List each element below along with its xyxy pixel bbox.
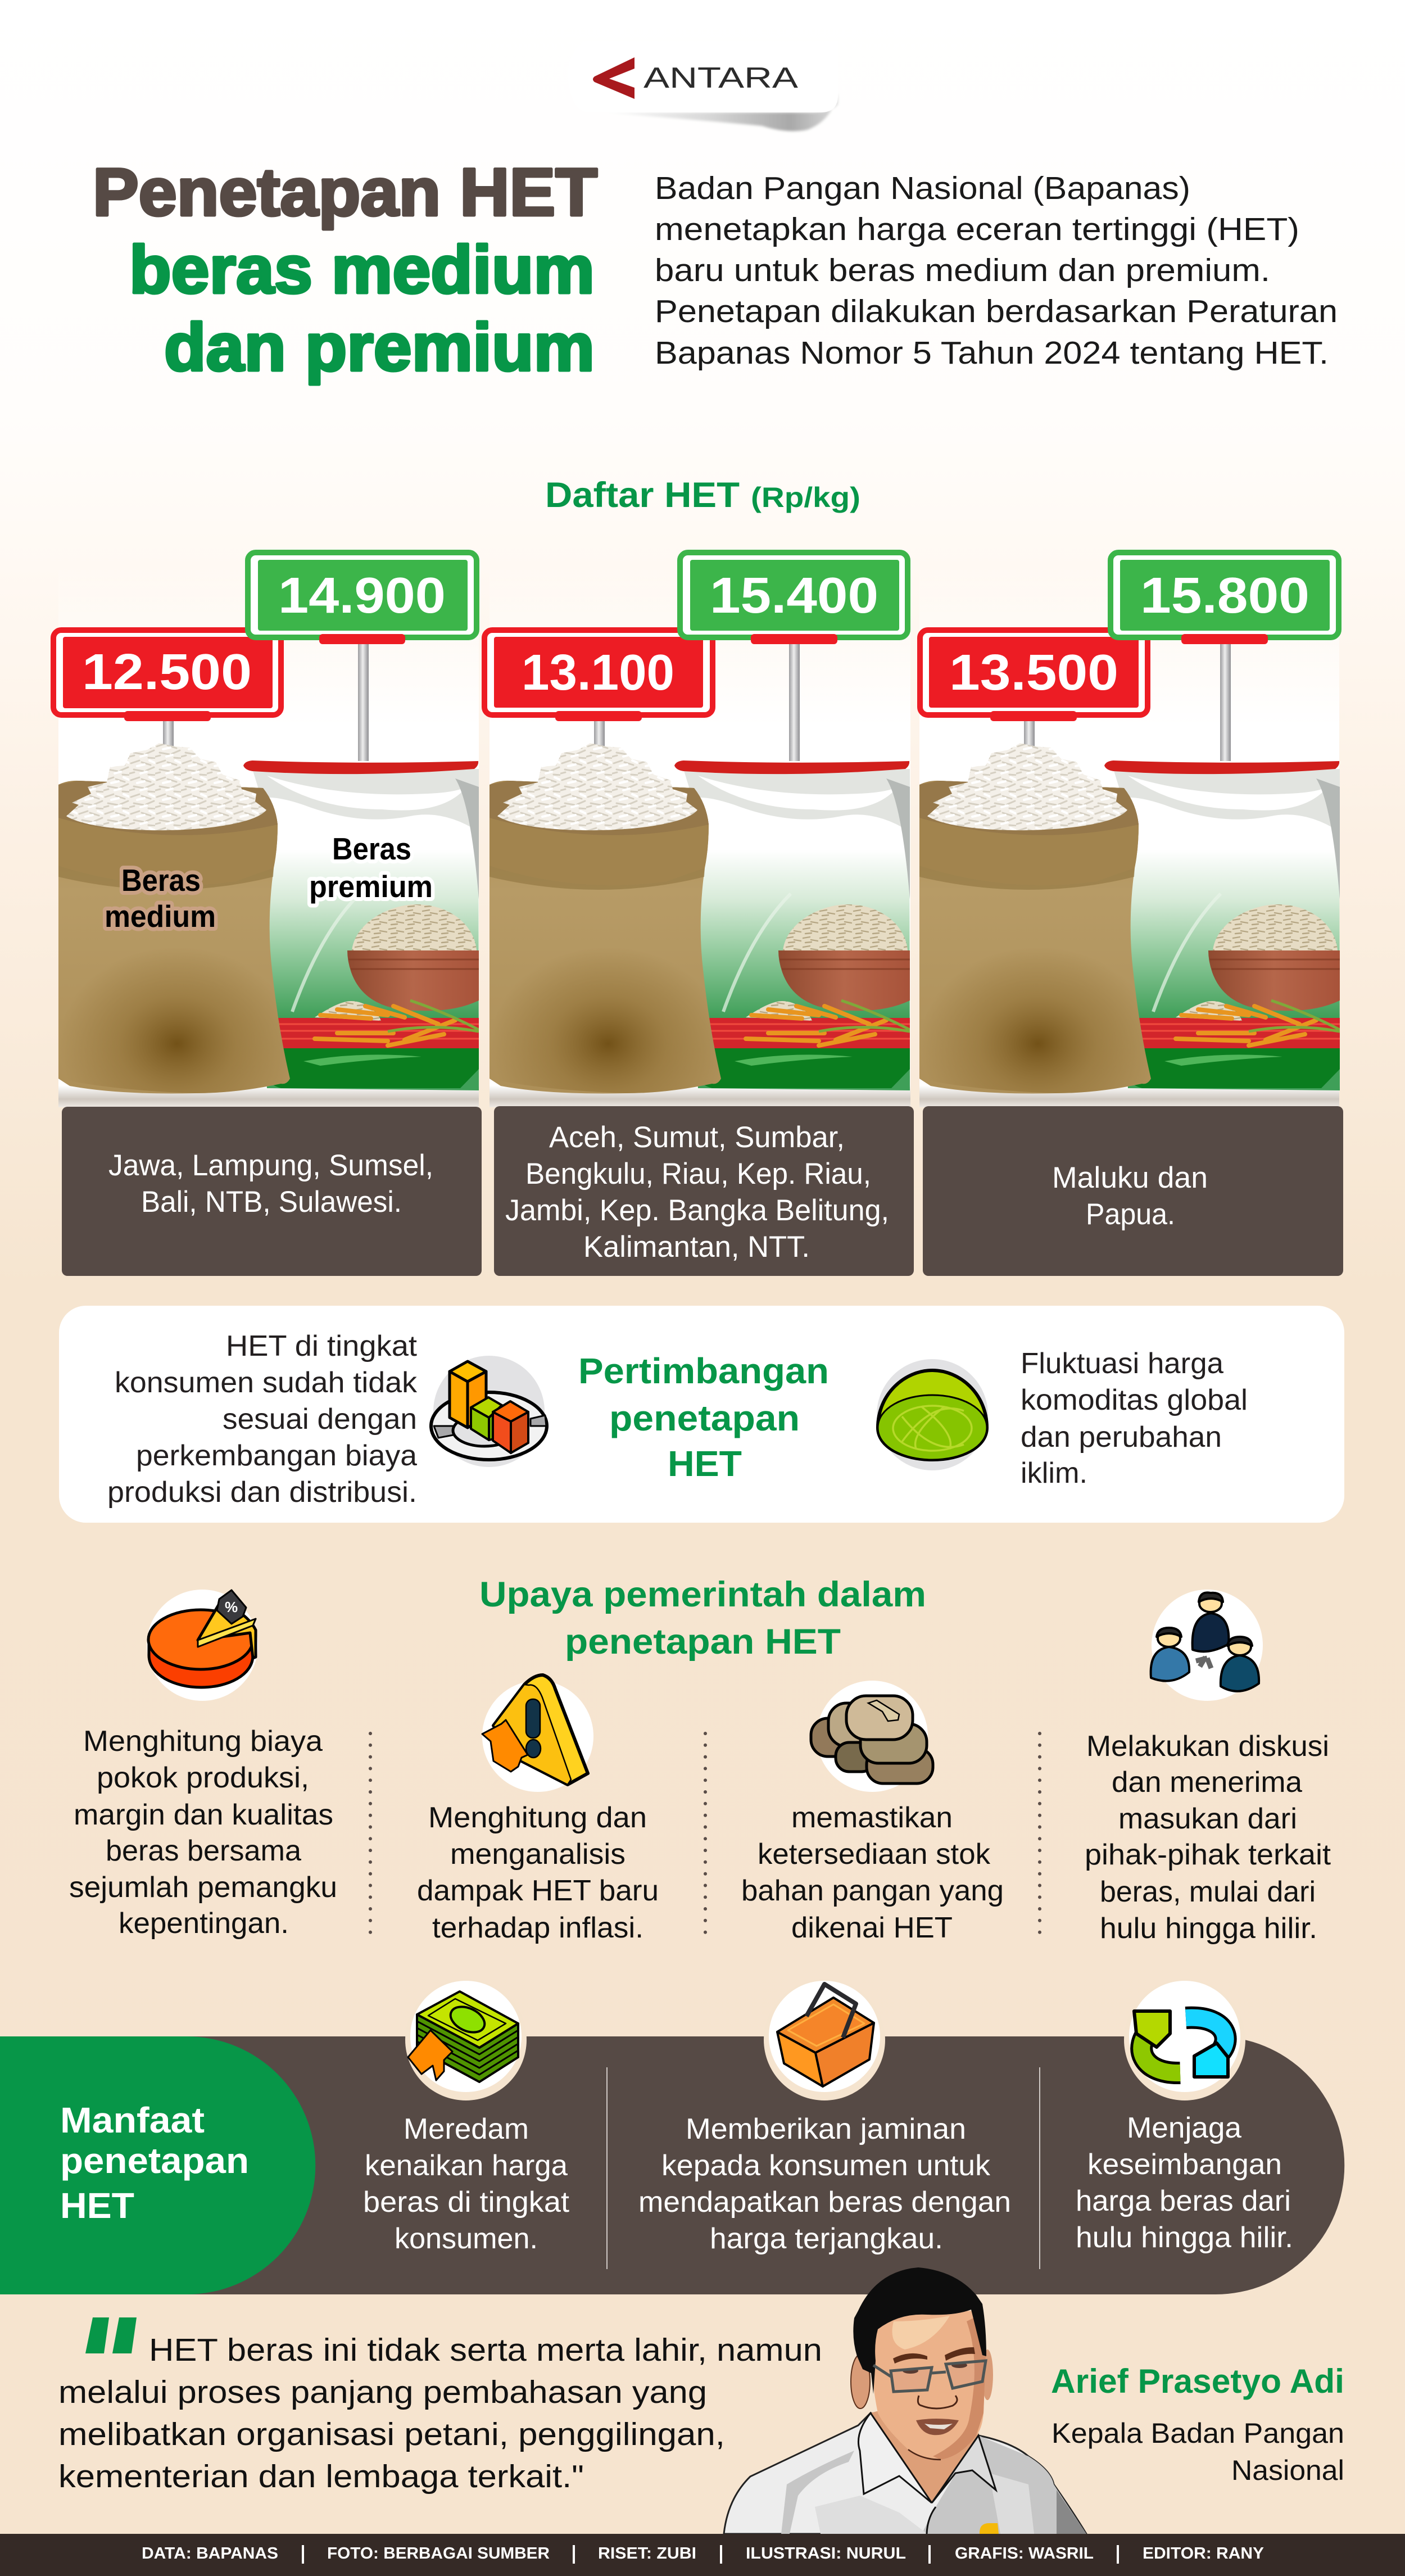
text: upaya 4: hulu hingga hilir. <box>1100 1912 1317 1945</box>
footer credits: ILUSTRASI: NURUL <box>746 2545 906 2563</box>
heading: manfaat: Manfaat <box>60 2100 205 2140</box>
panel: price column 3 <box>919 553 1343 1276</box>
label: beras premium: premium <box>309 869 433 904</box>
heading: Daftar HET: (Rp/kg) <box>751 482 860 513</box>
price tag: medium 12.500 <box>53 630 281 721</box>
heading: Daftar HET <box>545 476 860 515</box>
text: right consideration: iklim. <box>1021 1457 1087 1490</box>
intro text: Bapanas Nomor 5 Tahun 2024 tentang HET. <box>655 335 1329 371</box>
logo: ANTARA: ANTARA <box>643 62 798 94</box>
text: manfaat 3: Menjaga <box>1127 2112 1241 2144</box>
heading: pertimbangan: penetapan <box>609 1398 800 1438</box>
text: manfaat 3: harga beras dari <box>1076 2185 1291 2217</box>
quote: melibatkan organisasi petani, penggilingan, <box>58 2416 725 2452</box>
title: dan premium <box>164 310 595 385</box>
heading: pertimbangan: Pertimbangan <box>578 1351 829 1391</box>
footer credits: DATA: BAPANAS <box>142 2545 278 2563</box>
heading: Daftar HET: Daftar HET <box>545 476 740 515</box>
text: upaya 1 <box>69 1725 337 1940</box>
region box 2: Aceh, Sumut, Sumbar, <box>549 1121 845 1154</box>
text: upaya 3: memastikan <box>791 1801 953 1834</box>
quote <box>58 2317 822 2494</box>
title: Penetapan HET <box>93 155 597 230</box>
text: upaya 4: dan menerima <box>1112 1766 1302 1799</box>
text: upaya 3: bahan pangan yang <box>741 1875 1004 1907</box>
name: Arief Prasetyo Adi: Nasional <box>1231 2455 1344 2486</box>
label: beras medium: Beras <box>121 863 201 898</box>
name: Arief Prasetyo Adi <box>1051 2362 1344 2486</box>
text: upaya 1: margin dan kualitas <box>74 1799 333 1831</box>
price tag: premium 14.900 <box>248 553 477 644</box>
text: upaya 4: masukan dari <box>1118 1803 1297 1835</box>
text: upaya 2: terhadap inflasi. <box>432 1912 643 1944</box>
text: left consideration: HET di tingkat <box>226 1330 418 1362</box>
text: upaya 1: beras bersama <box>106 1835 301 1867</box>
footer credits: EDITOR: RANY <box>1143 2545 1264 2563</box>
text: manfaat 3: keseimbangan <box>1087 2148 1282 2181</box>
icon: rice sacks <box>811 1681 933 1792</box>
text: upaya 4 <box>1085 1730 1331 1945</box>
region box 3: Maluku dan <box>1052 1161 1208 1194</box>
region box 2 <box>494 1106 914 1276</box>
panel: pertimbangan penetapan HET <box>59 1306 1344 1523</box>
text: manfaat 2: Memberikan jaminan <box>686 2113 966 2145</box>
quote: kementerian dan lembaga terkait." <box>58 2459 584 2494</box>
title <box>93 155 597 385</box>
heading: pertimbangan <box>578 1351 829 1484</box>
icon: shopping basket <box>764 1979 885 2100</box>
heading: upaya pemerintah <box>479 1575 926 1662</box>
icon: warning with arrow <box>482 1675 593 1792</box>
text: left consideration: konsumen sudah tidak <box>115 1366 418 1399</box>
price tag: medium 13.100: 13.100 <box>522 645 674 701</box>
text: upaya 4: pihak-pihak terkait <box>1085 1839 1331 1871</box>
price tag: medium 13.500: 13.500 <box>949 645 1118 701</box>
intro text: Badan Pangan Nasional (Bapanas) <box>655 170 1190 206</box>
intro text: baru untuk beras medium dan premium. <box>655 252 1270 288</box>
text: manfaat 1: kenaikan harga <box>365 2149 568 2182</box>
icon: pie chart <box>147 1590 258 1701</box>
text: upaya 2: Menghitung dan <box>428 1801 647 1834</box>
price tag: premium 14.900: 14.900 <box>278 568 446 624</box>
text: upaya 2: dampak HET baru <box>417 1875 659 1907</box>
band: manfaat penetapan HET <box>0 1979 1344 2294</box>
region box 3: Papua. <box>1086 1198 1175 1231</box>
text: upaya 3 <box>741 1801 1004 1944</box>
price tag: premium 15.800: 15.800 <box>1140 568 1309 624</box>
region box 2: Jambi, Kep. Bangka Belitung, <box>505 1194 889 1227</box>
text: upaya 4: Melakukan diskusi <box>1086 1730 1329 1763</box>
intro text: menetapkan harga eceran tertinggi (HET) <box>655 211 1299 247</box>
text: upaya 1: pokok produksi, <box>97 1762 309 1794</box>
heading: manfaat: penetapan <box>60 2140 249 2181</box>
text: upaya 1: kepentingan. <box>119 1907 289 1940</box>
heading: upaya pemerintah: penetapan HET <box>565 1622 841 1662</box>
region box 2: Bengkulu, Riau, Kep. Riau, <box>525 1157 871 1190</box>
text: upaya 1: sejumlah pemangku <box>69 1871 337 1904</box>
icon: people discussion <box>1151 1590 1263 1701</box>
intro text <box>655 170 1338 371</box>
text: manfaat 1: konsumen. <box>395 2222 538 2255</box>
icon: green half globe <box>877 1359 988 1470</box>
heading: manfaat <box>60 2100 249 2226</box>
name: Arief Prasetyo Adi: Kepala Badan Pangan <box>1052 2417 1344 2449</box>
text: right consideration: dan perubahan <box>1021 1421 1222 1454</box>
region box 3 <box>923 1106 1343 1276</box>
price tag: premium 15.400 <box>680 553 908 644</box>
text: left consideration: sesuai dengan <box>223 1403 417 1436</box>
icon: money stack <box>405 1979 527 2100</box>
label: beras medium <box>105 863 216 934</box>
region box 1 <box>62 1107 482 1276</box>
text: upaya 2: menganalisis <box>450 1838 626 1871</box>
label: beras premium <box>309 831 433 904</box>
text: manfaat 2: mendapatkan beras dengan <box>638 2186 1011 2219</box>
price tag: medium 13.100 <box>484 630 713 721</box>
quote: HET beras ini tidak serta merta lahir, namun <box>149 2332 822 2368</box>
footer credits: GRAFIS: WASRIL <box>955 2545 1094 2563</box>
text: manfaat 2: kepada konsumen untuk <box>661 2149 991 2182</box>
icon: balance arrows <box>1124 1979 1245 2100</box>
icon: pie chart: % <box>225 1599 238 1615</box>
heading: upaya pemerintah: Upaya pemerintah dalam <box>479 1575 926 1614</box>
text: manfaat 1: beras di tingkat <box>363 2186 570 2219</box>
icon: bar chart <box>431 1356 547 1467</box>
footer credits <box>0 2534 1405 2576</box>
panel: price column 2 <box>484 553 914 1276</box>
text: right consideration: Fluktuasi harga <box>1021 1347 1223 1380</box>
text: left consideration <box>107 1330 418 1509</box>
heading: manfaat: HET <box>60 2185 134 2226</box>
quote: melalui proses panjang pembahasan yang <box>58 2374 707 2410</box>
text: right consideration: komoditas global <box>1021 1384 1248 1416</box>
text: right consideration <box>1021 1347 1248 1490</box>
price tag: premium 15.400: 15.400 <box>710 568 878 624</box>
label: beras medium: medium <box>105 899 216 934</box>
text: left consideration: perkembangan biaya <box>136 1439 417 1472</box>
region box 2: Kalimantan, NTT. <box>583 1230 810 1264</box>
icon: quotation mark <box>85 2317 137 2353</box>
price tag: medium 12.500: 12.500 <box>82 644 252 700</box>
text: upaya 3: ketersediaan stok <box>758 1838 991 1871</box>
intro text: Penetapan dilakukan berdasarkan Peraturan <box>655 293 1338 329</box>
footer credits: FOTO: BERBAGAI SUMBER <box>327 2545 550 2563</box>
text: manfaat 1: Meredam <box>404 2113 529 2145</box>
text: left consideration: produksi dan distribusi. <box>107 1476 417 1509</box>
text: manfaat 1 <box>363 2113 570 2255</box>
price tag: medium 13.500 <box>920 630 1148 721</box>
footer credits: RISET: ZUBI <box>598 2545 696 2563</box>
text: upaya 4: beras, mulai dari <box>1100 1876 1316 1908</box>
title: beras medium <box>129 232 595 307</box>
heading: pertimbangan: HET <box>668 1443 742 1484</box>
text: upaya 1: Menghitung biaya <box>83 1725 323 1758</box>
region box 1: Jawa, Lampung, Sumsel, <box>108 1149 433 1182</box>
text: manfaat 3 <box>1076 2112 1293 2254</box>
name: Arief Prasetyo Adi: Arief Prasetyo Adi <box>1051 2362 1344 2400</box>
logo: ANTARA <box>568 42 838 131</box>
text: upaya 3: dikenai HET <box>791 1912 953 1944</box>
text: manfaat 3: hulu hingga hilir. <box>1076 2221 1293 2254</box>
region box 1: Bali, NTB, Sulawesi. <box>141 1185 402 1219</box>
price tag: premium 15.800 <box>1111 553 1339 644</box>
text: manfaat 2: harga terjangkau. <box>710 2222 943 2255</box>
label: beras premium: Beras <box>332 831 411 866</box>
text: upaya 2 <box>417 1801 659 1944</box>
illustration: Arief Prasetyo Adi portrait <box>724 2267 1086 2534</box>
text: manfaat 2 <box>638 2113 1011 2255</box>
panel: price column 1 <box>53 553 482 1276</box>
